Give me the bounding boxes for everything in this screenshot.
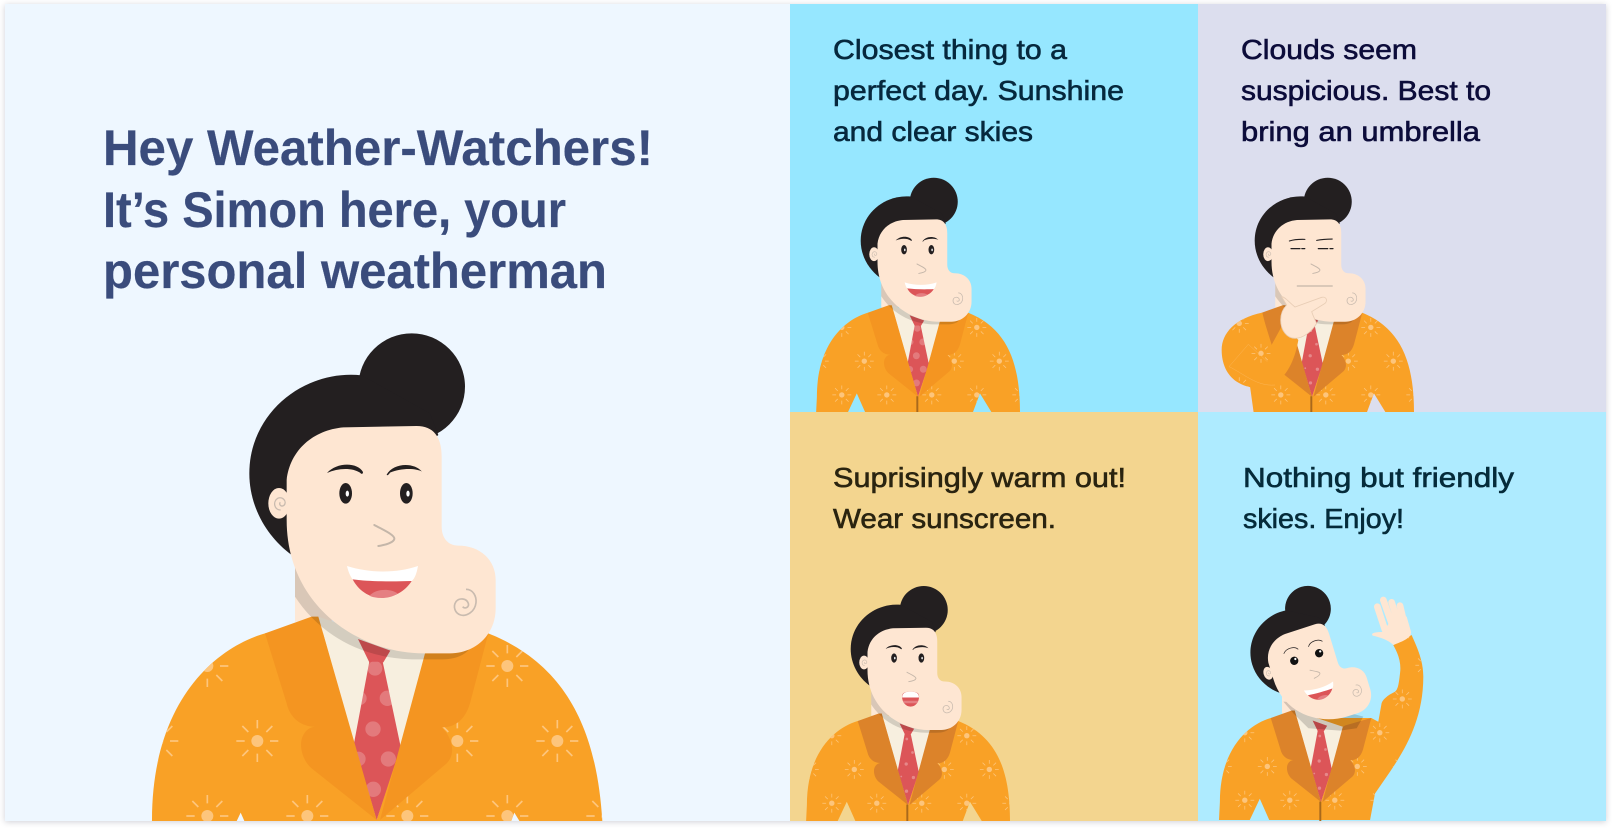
caption: clouds: bring an umbrella <box>1241 116 1480 147</box>
caption: perfect day <box>833 34 1124 147</box>
closed eyes and flat mouth <box>1289 239 1333 286</box>
caption: warm: Suprisingly warm out! <box>833 462 1126 493</box>
caption: clouds <box>1241 34 1491 147</box>
caption: clouds: Clouds seem <box>1241 34 1417 65</box>
arm and hand <box>1222 296 1327 388</box>
caption: warm: Wear sunscreen. <box>833 503 1056 534</box>
character: Simon thinking <box>1222 178 1414 412</box>
character: Simon waving <box>1219 586 1424 821</box>
panel: friendly skies <box>1198 412 1606 821</box>
panel: intro <box>5 4 790 828</box>
panel: warm <box>790 412 1198 823</box>
caption: friendly skies: Nothing but friendly <box>1243 462 1514 493</box>
tilted head <box>1250 586 1372 720</box>
open mouth <box>902 692 919 707</box>
heading: It’s Simon here, your <box>103 182 566 238</box>
heading: personal weatherman <box>103 243 607 299</box>
character: Simon smiling <box>810 178 1031 415</box>
caption: warm <box>833 462 1126 534</box>
caption: friendly skies <box>1243 462 1514 534</box>
heading: Hey Weather-Watchers! <box>103 120 653 176</box>
caption: friendly skies: skies. Enjoy! <box>1243 503 1404 534</box>
character: Simon surprised <box>800 586 1021 823</box>
panel: perfect day <box>790 4 1198 415</box>
caption: clouds: suspicious. Best to <box>1241 75 1491 106</box>
caption: perfect day: and clear skies <box>833 116 1033 147</box>
character: Simon large <box>136 333 628 828</box>
heading <box>103 120 653 299</box>
caption: perfect day: Closest thing to a <box>833 34 1067 65</box>
waving hand <box>1372 600 1411 645</box>
panel: clouds <box>1193 4 1606 415</box>
caption: perfect day: perfect day. Sunshine <box>833 75 1124 106</box>
